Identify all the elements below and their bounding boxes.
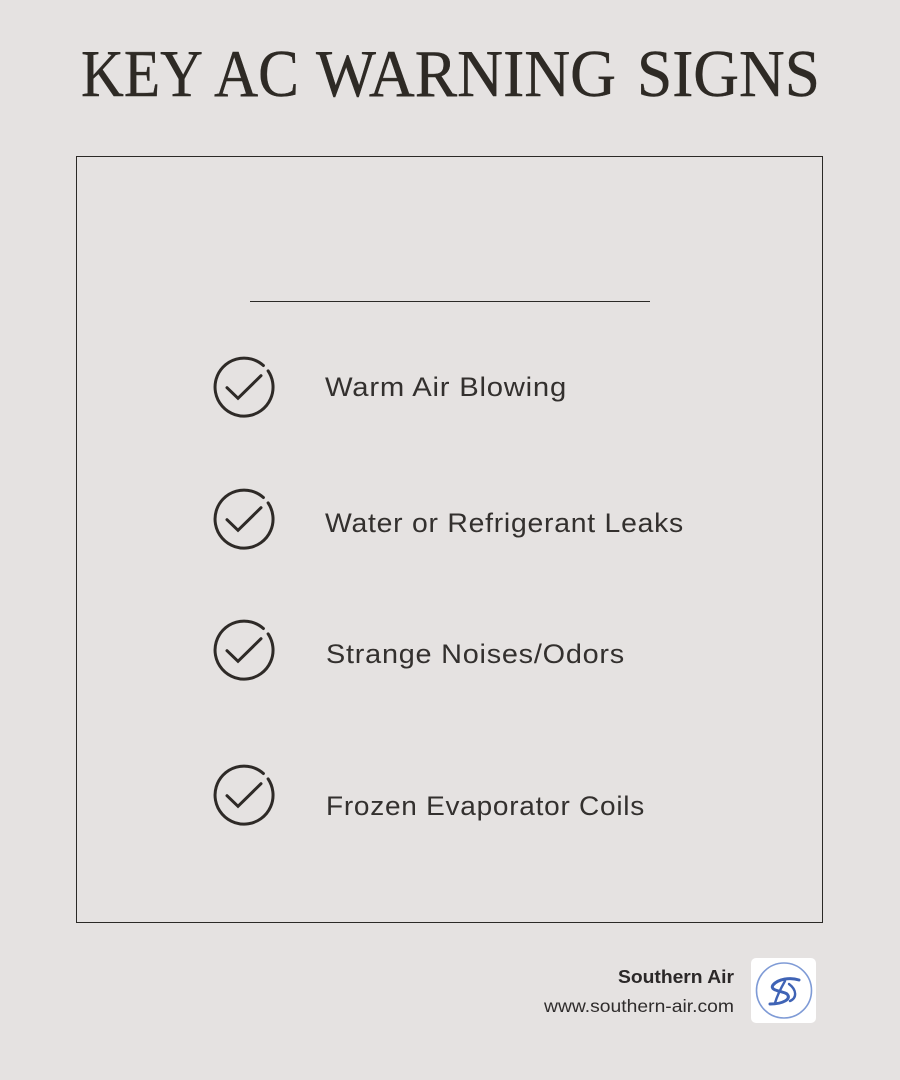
title: KEY bbox=[81, 37, 203, 111]
item: strange noises/odors bbox=[215, 621, 625, 679]
title: SIGNS bbox=[637, 37, 820, 111]
item: water or refrigerant leaks: Water or Refrigerant Leaks bbox=[325, 508, 684, 538]
item: strange noises/odors: Strange Noises/Odors bbox=[326, 639, 625, 669]
item: frozen evaporator coils bbox=[215, 766, 645, 824]
title: AC bbox=[214, 37, 299, 111]
item: water or refrigerant leaks bbox=[215, 490, 684, 548]
icon: check circle bbox=[215, 766, 273, 824]
item: warm air blowing: Warm Air Blowing bbox=[325, 372, 567, 402]
title bbox=[81, 37, 820, 111]
icon: check circle bbox=[215, 358, 273, 416]
item: frozen evaporator coils: Frozen Evaporator Coils bbox=[326, 791, 645, 821]
panel: warning signs bbox=[76, 156, 822, 922]
icon: company logo bbox=[751, 958, 816, 1023]
brand name: Southern Air bbox=[618, 967, 734, 987]
item: warm air blowing bbox=[215, 358, 567, 416]
title: WARNING bbox=[316, 37, 616, 111]
website: www.southern-air.com bbox=[543, 996, 734, 1016]
icon: check circle bbox=[215, 490, 273, 548]
icon: check circle bbox=[215, 621, 273, 679]
